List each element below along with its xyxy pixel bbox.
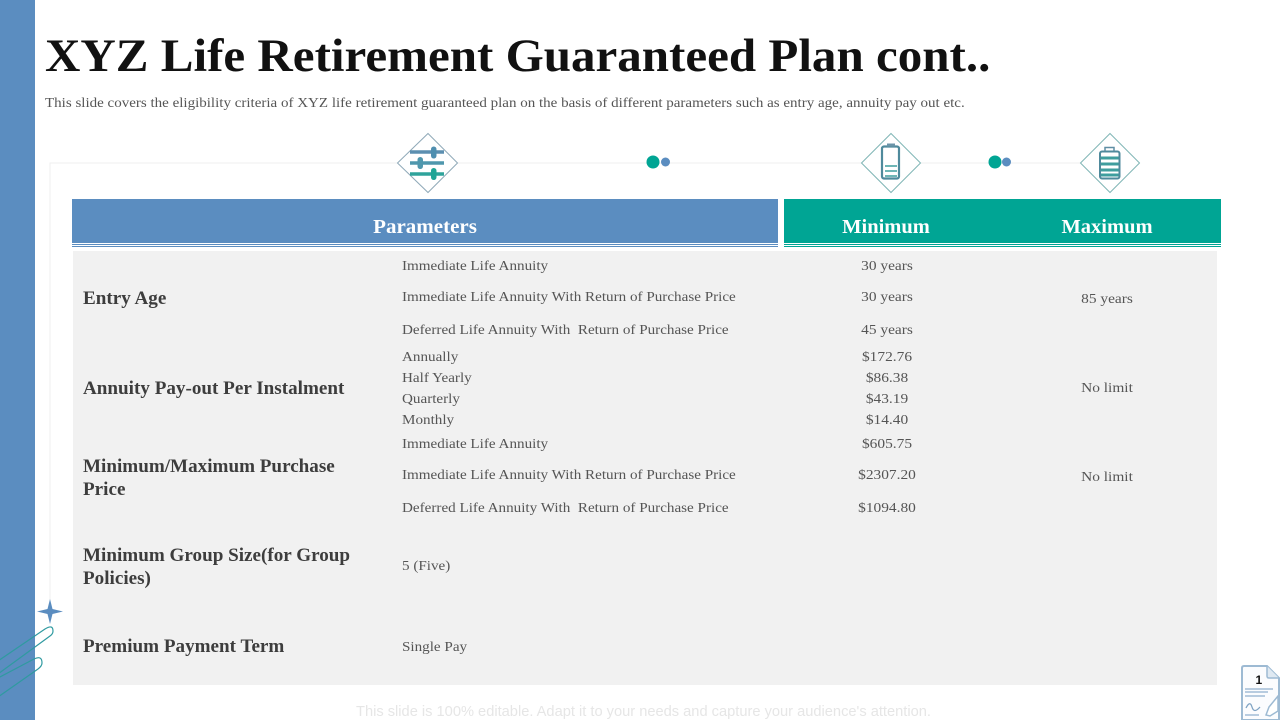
row labels: Annuity Pay-out Per Instalment xyxy=(83,379,344,399)
row labels: Policies) xyxy=(83,569,151,589)
parameter details xyxy=(402,258,736,654)
minimum values: 30 years xyxy=(861,289,913,304)
row labels: Price xyxy=(83,480,125,500)
minimum values: $14.40 xyxy=(866,412,908,427)
title: XYZ Life Retirement Guaranteed Plan cont.. xyxy=(45,30,990,82)
subtitle: This slide covers the eligibility criteria of XYZ life retirement guaranteed plan on the basis of different parameters such as entry age, annuity pay out etc. xyxy=(45,95,965,110)
minimum values: $43.19 xyxy=(866,391,908,406)
header label: Minimum xyxy=(842,216,930,238)
parameter details: Single Pay xyxy=(402,639,467,654)
maximum values: No limit xyxy=(1081,469,1133,484)
header: minimum and maximum xyxy=(784,199,1221,247)
row labels: Entry Age xyxy=(83,289,166,309)
minimum values xyxy=(858,258,916,515)
parameter details: Deferred Life Annuity With Return of Purchase Price xyxy=(402,322,729,337)
minimum values: $605.75 xyxy=(862,436,912,451)
decoration: sparkle and loops xyxy=(0,599,63,696)
parameter details: Deferred Life Annuity With Return of Purchase Price xyxy=(402,500,729,515)
parameter details: Annually xyxy=(402,349,458,364)
left sidebar band xyxy=(0,0,35,720)
parameter details: Immediate Life Annuity With Return of Purchase Price xyxy=(402,467,736,482)
parameter details: Immediate Life Annuity xyxy=(402,258,548,273)
maximum values: No limit xyxy=(1081,380,1133,395)
row labels: Minimum Group Size(for Group xyxy=(83,546,350,566)
parameter details: Monthly xyxy=(402,412,454,427)
row labels xyxy=(83,289,350,657)
minimum values: 45 years xyxy=(861,322,913,337)
header: parameters xyxy=(72,199,778,247)
icon: page number document xyxy=(1241,665,1280,720)
parameter details: Immediate Life Annuity xyxy=(402,436,548,451)
minimum values: 30 years xyxy=(861,258,913,273)
maximum values: 85 years xyxy=(1081,291,1133,306)
minimum values: $86.38 xyxy=(866,370,908,385)
row labels: Premium Payment Term xyxy=(83,637,284,657)
connector dots xyxy=(988,156,1011,168)
maximum values xyxy=(1081,291,1133,484)
icon: sliders xyxy=(396,132,458,194)
parameter details: 5 (Five) xyxy=(402,558,450,573)
header label: Maximum xyxy=(1061,216,1153,238)
header label: Parameters xyxy=(373,216,476,238)
footer note: This slide is 100% editable. Adapt it to your needs and capture your audience's attention. xyxy=(356,704,931,720)
parameter details: Half Yearly xyxy=(402,370,472,385)
parameter details: Quarterly xyxy=(402,391,460,406)
minimum values: $172.76 xyxy=(862,349,912,364)
parameter details: Immediate Life Annuity With Return of Purchase Price xyxy=(402,289,736,304)
minimum values: $1094.80 xyxy=(858,500,916,515)
table body xyxy=(73,251,1217,685)
row labels: Minimum/Maximum Purchase xyxy=(83,457,335,477)
page number: 1 xyxy=(1256,673,1262,687)
icon: low battery xyxy=(860,132,922,194)
connector dots xyxy=(646,156,670,168)
minimum values: $2307.20 xyxy=(858,467,916,482)
icon: full battery xyxy=(1080,132,1140,194)
